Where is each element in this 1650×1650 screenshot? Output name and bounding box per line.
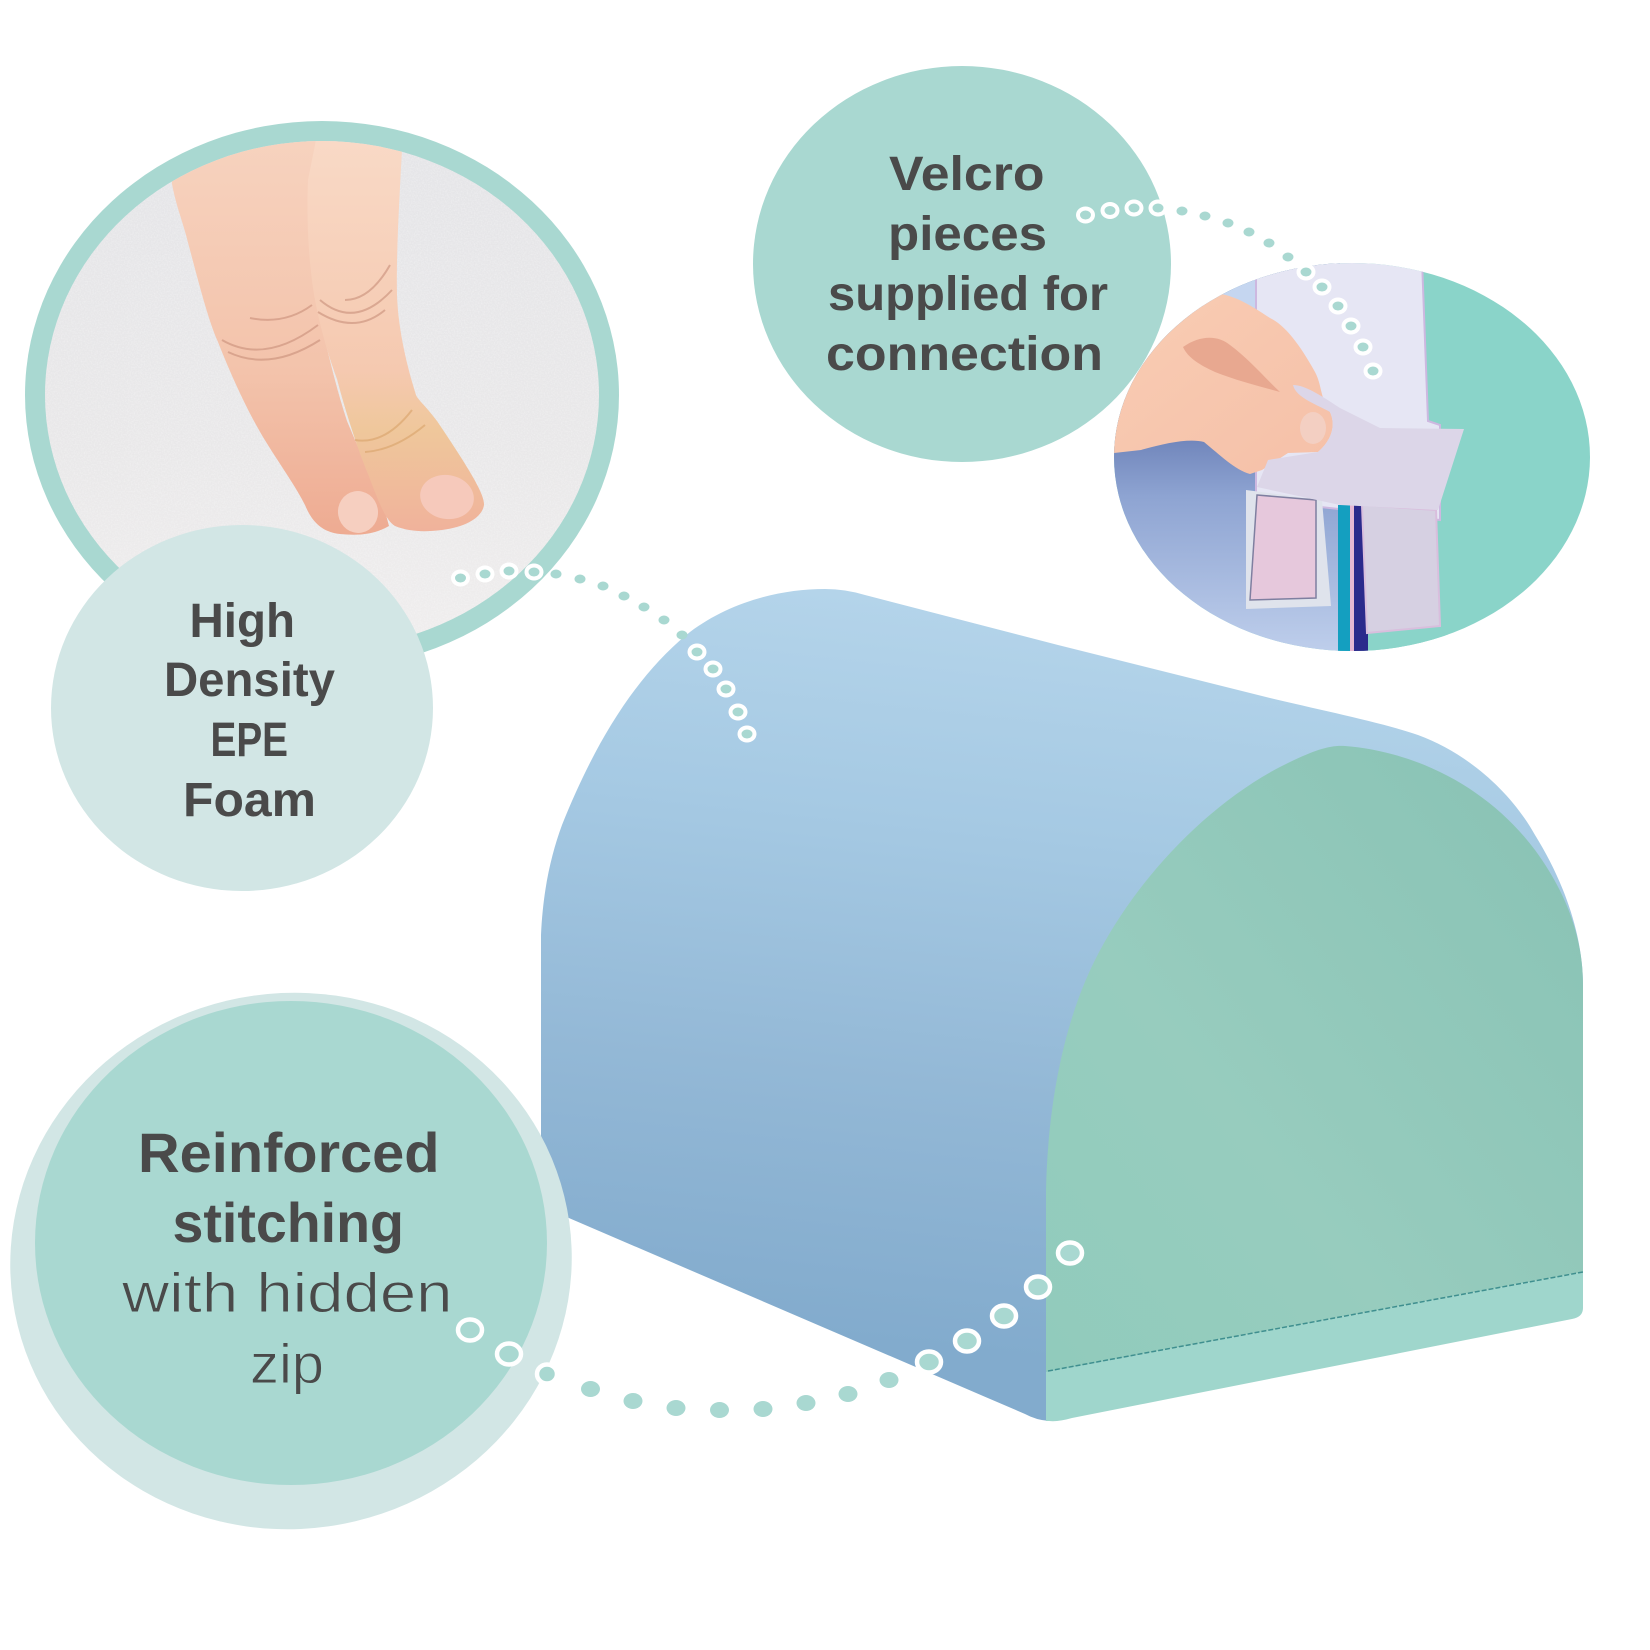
callout text: High <box>190 595 295 648</box>
thumbnail <box>1300 412 1326 444</box>
callout text: pieces <box>888 208 1047 261</box>
lower pink velcro piece <box>1246 490 1331 609</box>
callout text <box>121 1121 453 1395</box>
callout circle: High Density EPE Foam <box>51 525 433 891</box>
callout text: EPE <box>210 714 288 767</box>
left fingernail <box>338 491 378 533</box>
callout text: Foam <box>183 774 316 827</box>
teal ring <box>25 121 619 669</box>
callout text: Reinforced <box>138 1121 440 1184</box>
teal background <box>1110 260 1595 655</box>
callout text: supplied for <box>828 268 1108 321</box>
bolster green end face <box>1046 746 1583 1421</box>
velcro flap <box>1257 385 1464 510</box>
photo circle: finger pressing foam <box>25 121 619 669</box>
left finger <box>168 130 389 535</box>
hand <box>1105 293 1333 474</box>
dotted connector: foam callout to bolster <box>453 564 754 740</box>
foam photo <box>40 130 605 655</box>
product: blue and green half-round bolster <box>541 589 1583 1421</box>
wall lilac left side <box>1110 260 1340 655</box>
finger gap shadow <box>1183 338 1280 392</box>
callout circle: Reinforced stitching with hidden zip <box>0 957 607 1565</box>
callout text <box>826 148 1108 381</box>
callout text: with hidden <box>121 1261 453 1324</box>
white strip <box>1256 260 1440 520</box>
dotted connector: velcro callout to photo <box>1078 202 1380 378</box>
callout text: connection <box>826 328 1103 381</box>
callout text: stitching <box>172 1191 404 1254</box>
callout text <box>164 595 335 827</box>
teal gap under stripes <box>1368 634 1448 651</box>
callout circle: Velcro pieces <box>753 66 1171 462</box>
dotted connector: stitching callout to seam <box>458 1242 1082 1418</box>
stitching line <box>1048 1272 1583 1371</box>
outer pale circle <box>0 957 607 1565</box>
knuckle creases <box>222 265 425 452</box>
callout text: zip <box>250 1332 324 1395</box>
photo circle: hand attaching velcro <box>1105 260 1595 656</box>
bolster green bottom strip <box>1046 1272 1583 1421</box>
callout text: Velcro <box>889 148 1044 201</box>
bolster blue body <box>541 589 1583 1421</box>
inner teal circle <box>35 1001 547 1485</box>
grey velcro piece <box>1362 505 1440 633</box>
right finger <box>307 130 484 531</box>
colored stripes <box>1338 505 1350 655</box>
right fingernail <box>420 475 474 519</box>
callout text: Density <box>164 654 335 707</box>
